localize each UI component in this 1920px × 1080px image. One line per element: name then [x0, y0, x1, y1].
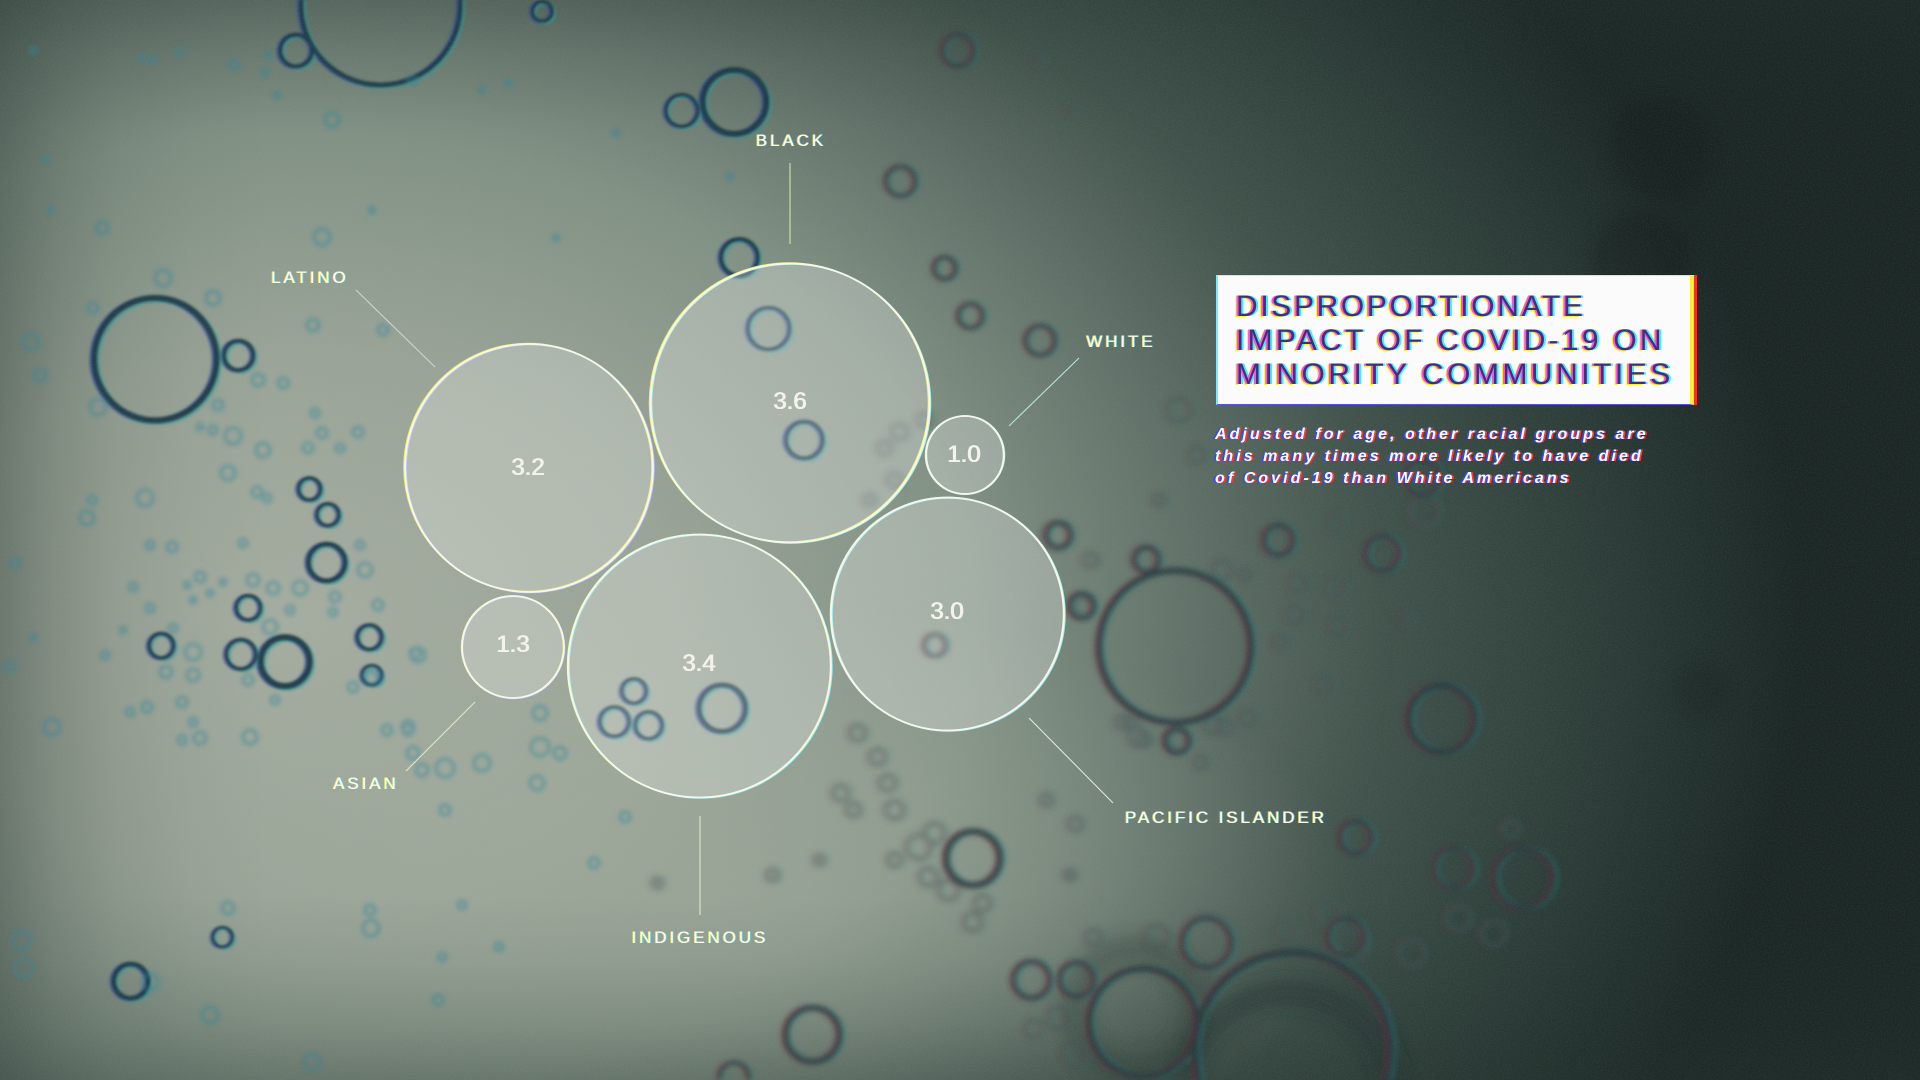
bubble: White 1.0: [926, 416, 1004, 494]
leader line: Latino: [356, 290, 435, 367]
leader line: Black: [789, 163, 791, 244]
bubble: Black 3.6: [650, 263, 930, 543]
value 3.2: 3.2: [511, 454, 545, 481]
title box: DISPROPORTIONATE: [1236, 290, 1586, 323]
subtitle: of Covid-19 than White Americans: [1215, 470, 1572, 487]
subtitle: Adjusted for age, other racial groups are: [1215, 426, 1649, 443]
bubble: Indigenous 3.4: [568, 534, 832, 798]
bubble: Latino 3.2: [404, 344, 654, 592]
leader line: Pacific Islander: [1029, 718, 1113, 803]
label Asian: ASIAN: [333, 774, 399, 793]
leader line: White: [1009, 358, 1079, 426]
title box: MINORITY COMMUNITIES: [1236, 358, 1674, 391]
label Latino: LATINO: [271, 268, 349, 287]
label Black: BLACK: [756, 131, 826, 150]
value 3.0: 3.0: [930, 598, 964, 625]
value 3.4: 3.4: [682, 650, 716, 677]
title box: IMPACT OF COVID-19 ON: [1236, 324, 1665, 357]
bubble: Asian 1.3: [462, 596, 564, 698]
leader line: Asian: [406, 702, 475, 771]
bubble: Pacific Islander 3.0: [830, 498, 1065, 731]
value 3.6: 3.6: [773, 388, 807, 415]
label White: WHITE: [1086, 332, 1156, 351]
value 1.3: 1.3: [496, 631, 530, 658]
subtitle: this many times more likely to have died: [1215, 448, 1644, 465]
value 1.0: 1.0: [947, 441, 981, 468]
title box: [1216, 275, 1694, 405]
leader line: Indigenous: [699, 816, 701, 915]
subtitle: [1213, 426, 1649, 487]
label Pacific Islander: PACIFIC ISLANDER: [1125, 808, 1327, 827]
label Indigenous: INDIGENOUS: [632, 928, 768, 947]
